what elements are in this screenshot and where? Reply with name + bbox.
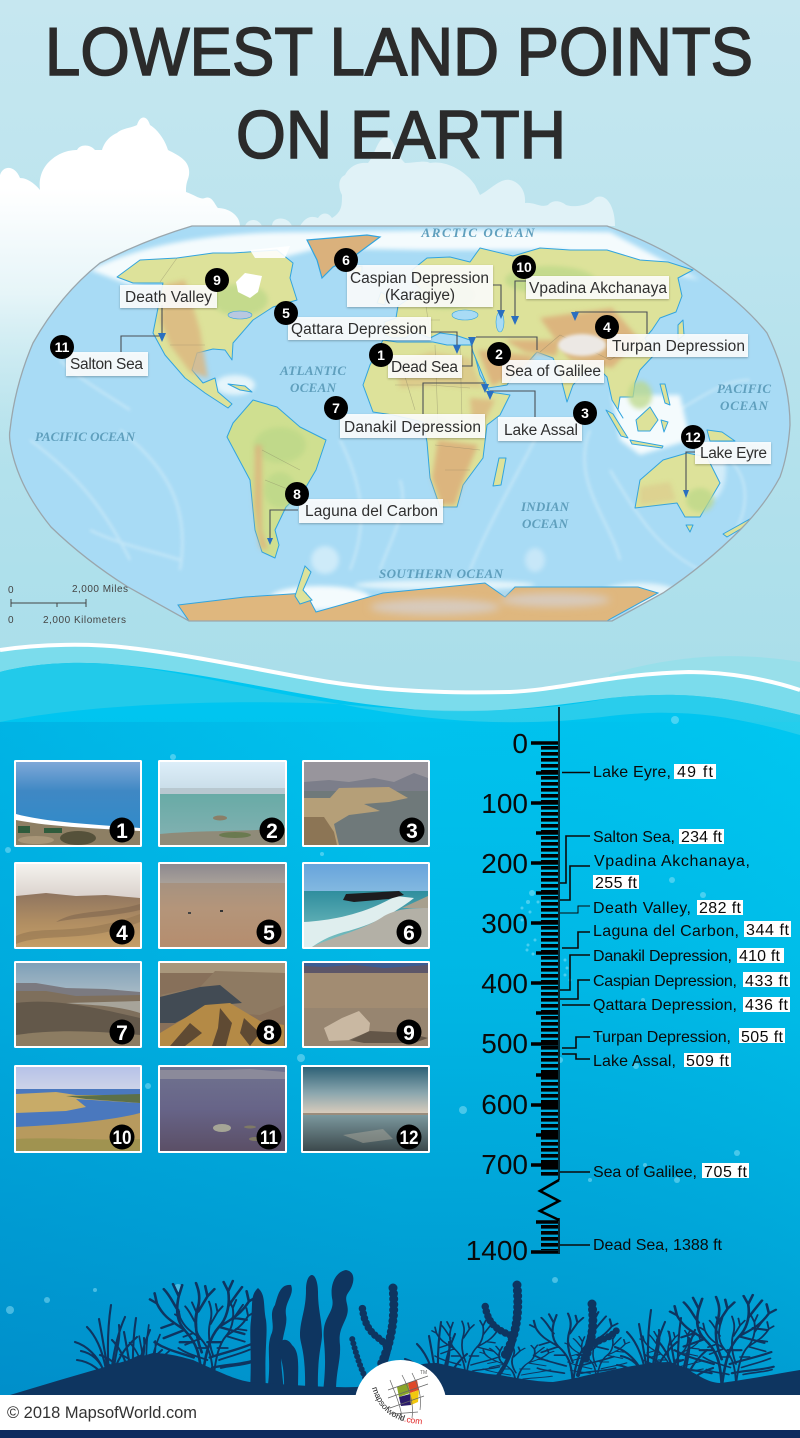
label: Lake Eyre — [695, 442, 771, 464]
depth: Sea of Galilee: 705 ft — [704, 1164, 748, 1181]
ruler numbers: 600 — [481, 1089, 528, 1120]
label: Caspian Depression — [347, 265, 493, 307]
photo 8 — [158, 961, 287, 1048]
label: Qattara Depression: Qattara Depression — [291, 321, 427, 338]
depth: Death Valley — [593, 900, 743, 917]
label: Salton Sea: Salton Sea — [70, 356, 143, 373]
depth: Lake Eyre: Lake Eyre, — [593, 764, 671, 781]
depth: Turpan Depression: Turpan Depression, — [593, 1029, 731, 1046]
greenland — [307, 235, 380, 278]
depth: Sea of Galilee: Sea of Galilee, — [593, 1164, 697, 1181]
map outline — [10, 226, 790, 621]
photo 7: 7 — [116, 1022, 128, 1045]
map number markers: 4 — [603, 319, 611, 335]
depth: Danakil Depression: 410 ft — [739, 948, 781, 965]
ruler numbers: 400 — [481, 968, 528, 999]
map scale — [8, 584, 128, 626]
ocean labels: INDIAN — [520, 499, 570, 514]
depth: Death Valley: 282 ft — [699, 900, 742, 917]
country borders — [160, 258, 650, 490]
ocean labels: SOUTHERN OCEAN — [379, 566, 504, 581]
depth: Vpadina Akchanaya: 255 ft — [595, 875, 638, 892]
depth: Caspian Depression: 433 ft — [745, 973, 789, 990]
world map — [0, 220, 800, 630]
depth: Sea of Galilee — [593, 1163, 749, 1181]
depth: Laguna del Carbon: 344 ft — [746, 922, 790, 939]
seas — [228, 310, 504, 332]
label: Danakil Depression: Danakil Depression — [344, 419, 481, 436]
map number markers: 6 — [342, 252, 350, 268]
ocean labels: ARCTIC OCEAN — [420, 225, 535, 240]
map scale: 0 — [8, 615, 14, 626]
depth: Salton Sea — [593, 829, 724, 846]
ruler numbers — [466, 728, 528, 1266]
photo 2: 2 — [266, 820, 278, 843]
footer bar — [0, 1395, 800, 1430]
photo 3: 3 — [406, 820, 418, 843]
ruler numbers: 100 — [481, 788, 528, 819]
depth: Lake Assal: Lake Assal, — [593, 1053, 676, 1070]
map number markers — [50, 248, 705, 506]
label: Dead Sea: Dead Sea — [391, 359, 458, 376]
logo: TM — [420, 1370, 427, 1376]
photo 9 — [302, 961, 430, 1048]
depth: Laguna del Carbon — [593, 921, 791, 940]
ruler ticks — [531, 743, 558, 1252]
photo 12 — [301, 1065, 430, 1153]
label: Laguna del Carbon: Laguna del Carbon — [305, 503, 438, 520]
bubbles — [5, 716, 740, 1314]
title: LOWEST LAND POINTS — [45, 14, 753, 90]
ocean labels — [35, 225, 771, 581]
label: Lake Assal — [498, 417, 582, 441]
map scale: 0 — [8, 585, 14, 596]
label: Caspian Depression: (Karagiye) — [385, 287, 455, 304]
ocean labels: PACIFIC — [717, 381, 771, 396]
depth: Danakil Depression: Danakil Depression, — [593, 948, 732, 965]
ruler numbers: 200 — [481, 848, 528, 879]
label: Turpan Depression — [607, 334, 748, 357]
photo grid — [14, 760, 430, 1153]
depth: Dead Sea: Dead Sea, 1388 ft — [593, 1237, 723, 1254]
photo 4: 4 — [116, 922, 128, 945]
logo: mapsofworld.com — [372, 1387, 422, 1424]
ruler numbers: 1400 — [466, 1235, 528, 1266]
map leader lines and pins — [121, 281, 695, 545]
label: Laguna del Carbon — [299, 499, 443, 523]
label: Salton Sea — [66, 352, 148, 376]
map number markers: 8 — [293, 486, 301, 502]
ruler leader lines — [560, 772, 590, 1245]
depth: Turpan Depression — [593, 1028, 785, 1046]
continents — [117, 248, 757, 558]
depth: Lake Assal — [593, 1053, 731, 1070]
map number markers: 1 — [377, 347, 385, 363]
ocean labels: OCEAN — [720, 398, 769, 413]
branching corals — [150, 1281, 776, 1387]
photo 10 — [14, 1065, 142, 1153]
photo 1 — [14, 760, 142, 847]
label: Death Valley — [120, 285, 217, 308]
photo 7 — [14, 961, 142, 1048]
map number markers: 2 — [495, 346, 503, 362]
depth: Lake Eyre — [593, 764, 716, 781]
label: Dead Sea — [388, 355, 462, 378]
photo 3 — [302, 760, 430, 847]
map number markers: 11 — [55, 339, 70, 355]
map number markers: 3 — [581, 405, 589, 421]
label: Caspian Depression: Caspian Depression — [350, 270, 489, 287]
map scale: 2,000 Miles — [72, 584, 128, 595]
title: ON EARTH — [236, 97, 566, 173]
sea grass — [75, 1305, 713, 1392]
depth: Salton Sea: Salton Sea, — [593, 829, 675, 846]
label: Vpadina Akchanaya: Vpadina Akchanaya — [529, 280, 667, 297]
depth: Lake Eyre: 49 ft — [677, 764, 714, 781]
map number markers: 10 — [516, 259, 532, 275]
ruler numbers: 0 — [512, 728, 528, 759]
kelp — [250, 1270, 353, 1392]
depth: Laguna del Carbon: Laguna del Carbon, — [593, 923, 739, 940]
beaded corals — [352, 1285, 617, 1392]
photo 1: 1 — [116, 820, 128, 843]
depth: Caspian Depression — [593, 972, 790, 990]
terrain shading — [212, 266, 714, 512]
photo 9: 9 — [403, 1022, 415, 1045]
label: Sea of Galilee — [502, 360, 604, 383]
photo 5: 5 — [263, 922, 275, 945]
ruler numbers: 500 — [481, 1028, 528, 1059]
map number markers: 5 — [282, 305, 290, 321]
depth: Turpan Depression: 505 ft — [741, 1029, 784, 1046]
bottom navy band — [0, 1430, 800, 1438]
ruler axis — [558, 707, 560, 1254]
photo 8: 8 — [263, 1022, 275, 1045]
photo 2 — [158, 760, 287, 847]
map scale: 2,000 Kilometers — [43, 615, 126, 626]
photo 10: 10 — [112, 1128, 132, 1149]
map number markers: 9 — [213, 272, 221, 288]
photo 6 — [302, 862, 430, 949]
title — [45, 14, 753, 173]
depth: Death Valley: Death Valley, — [593, 900, 691, 917]
depth ruler — [466, 707, 791, 1266]
ocean labels: ATLANTIC — [279, 363, 346, 378]
ocean labels: OCEAN — [290, 380, 337, 395]
label: Turpan Depression: Turpan Depression — [612, 338, 745, 355]
copyright: © 2018 MapsofWorld.com — [7, 1404, 197, 1422]
photo 5 — [158, 862, 287, 949]
photo 4 — [14, 862, 142, 949]
logo — [356, 1360, 446, 1424]
ruler numbers: 300 — [481, 908, 528, 939]
ocean labels: OCEAN — [522, 516, 569, 531]
depth: Lake Assal: 509 ft — [686, 1053, 730, 1070]
seabed silhouette — [10, 1270, 800, 1396]
label: Danakil Depression — [340, 414, 485, 438]
label: Lake Eyre: Lake Eyre — [700, 445, 767, 462]
label: Death Valley: Death Valley — [125, 289, 212, 306]
photo 6: 6 — [403, 922, 415, 945]
photo 12: 12 — [400, 1128, 418, 1149]
map number markers: 12 — [685, 429, 701, 445]
depth: Caspian Depression: Caspian Depression, — [593, 973, 737, 990]
depth: Qattara Depression: 436 ft — [745, 997, 789, 1014]
map number markers: 7 — [332, 400, 340, 416]
ice and snow — [236, 246, 606, 356]
seabed ground — [10, 1353, 800, 1396]
depth: Vpadina Akchanaya: Vpadina Akchanaya, — [594, 853, 750, 870]
ocean labels: PACIFIC OCEAN — [35, 429, 136, 444]
map ocean and land — [0, 220, 800, 630]
antarctica — [178, 583, 658, 621]
map labels — [66, 265, 771, 523]
sky background — [0, 0, 800, 700]
ruler numbers: 700 — [481, 1149, 528, 1180]
label: Lake Assal: Lake Assal — [504, 422, 578, 439]
depth: Qattara Depression: Qattara Depression, — [593, 997, 737, 1014]
depth: Vpadina Akchanaya — [593, 853, 750, 892]
water background with waves — [0, 645, 800, 1395]
label: Sea of Galilee: Sea of Galilee — [505, 363, 601, 380]
clouds — [0, 118, 615, 470]
depth: Salton Sea: 234 ft — [681, 829, 723, 846]
depth labels — [593, 764, 791, 1254]
photo 11: 11 — [260, 1128, 278, 1149]
photo 11 — [158, 1065, 287, 1153]
ruler break zigzag — [540, 1180, 559, 1220]
